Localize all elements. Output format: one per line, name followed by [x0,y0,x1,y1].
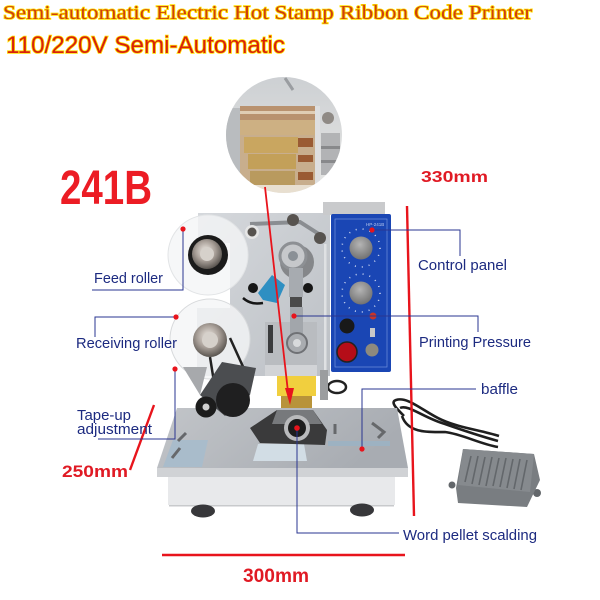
dimension: 330mm [407,169,488,516]
upper dial [350,236,372,260]
blue control panel [331,214,391,372]
blue sensor [258,275,285,303]
print head chassis [250,410,327,445]
model label: 241B [60,162,152,215]
top silver box [323,202,385,215]
print head block [265,316,346,413]
label: Receiving roller [76,314,179,352]
label: Tape-up adjustment [77,366,178,439]
base plate [157,408,408,506]
feet [191,504,374,518]
dimension: 330mm: 330mm [421,169,488,186]
ribbon discs [168,215,250,379]
label: Control panel [369,227,507,274]
black motor [183,362,256,418]
dimension: 250mm: 250mm [62,462,128,481]
toggle switches [370,312,376,320]
label: Control panel: Control panel [418,257,507,274]
label: Receiving roller: Receiving roller [76,335,177,352]
key switch [340,318,354,334]
label: Feed roller: Feed roller [94,270,163,287]
pressure arm [248,243,314,339]
upper roller [188,235,228,275]
panel model tag: HP-241B [366,222,384,227]
label: Printing Pressure [291,313,531,351]
label: Word pellet scalding [294,425,537,544]
red button [337,342,357,362]
dimension: 300mm: 300mm [243,566,309,587]
ribbon guide arm [250,222,322,236]
dimension: 250mm [62,405,154,481]
label: Tape-up adjustment: Tape-up [77,407,131,424]
title: Semi-automatic Electric Hot Stamp Ribbon Code Printer [3,2,532,24]
dimension: pointer arrow [265,187,294,405]
lower dial [350,282,372,304]
lower roller [193,323,250,382]
label: baffle [359,381,518,452]
label: Word pellet scalding: Word pellet scalding [403,527,537,544]
label: Feed roller [92,226,186,290]
label: Printing Pressure: Printing Pressure [419,334,531,351]
foot pedal cable [394,399,499,447]
label: Tape-up adjustment: adjustment [77,421,153,438]
wing nuts [172,423,384,458]
back plate [197,213,330,376]
label: baffle: baffle [481,381,518,398]
subtitle: 110/220V Semi-Automatic [6,32,285,59]
machine [157,202,541,518]
foot pedal [448,449,541,507]
inset: magnified print head [226,77,344,193]
